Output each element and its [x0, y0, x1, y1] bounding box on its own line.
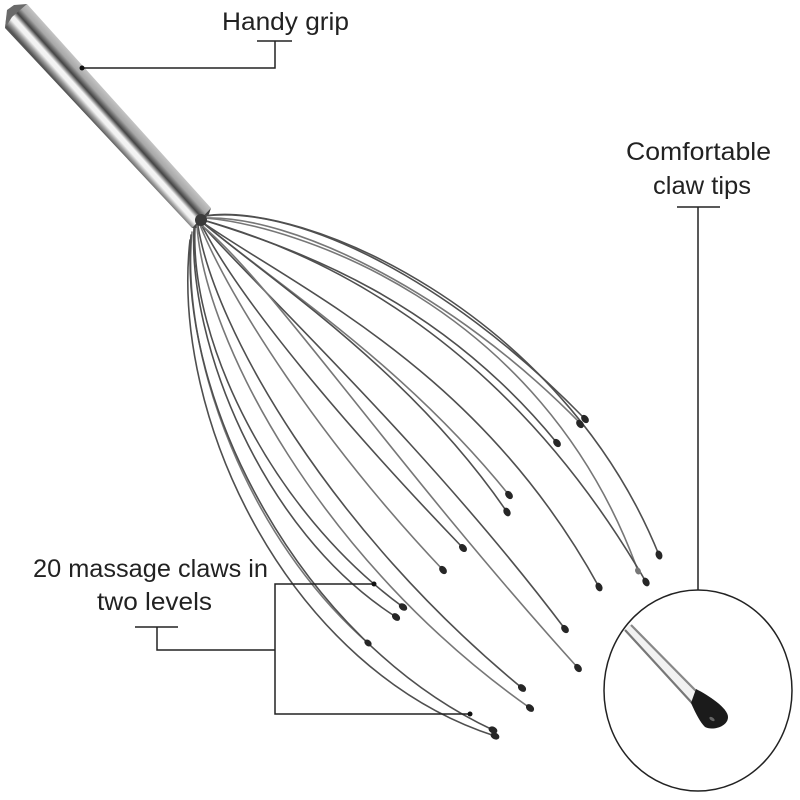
- callout: handy grip: Handy grip: [222, 8, 349, 36]
- handle: steel grip: [5, 4, 211, 228]
- callout: comfortable claw tips: claw tips: [653, 172, 751, 200]
- inset: magnified claw tip: [604, 590, 792, 791]
- callout: comfortable claw tips: [626, 138, 771, 590]
- callout: handy grip: [80, 8, 349, 70]
- callout: 20 massage claws in two levels: two levels: [97, 588, 212, 616]
- claw tips: black rubber beads: [363, 413, 664, 741]
- callout: 20 massage claws in two levels: [33, 555, 472, 716]
- hub: wire collar: [195, 214, 207, 226]
- callout: 20 massage claws in two levels: 20 massage claws in: [33, 555, 268, 583]
- callout: comfortable claw tips: Comfortable: [626, 138, 771, 166]
- wires: 20 massage claws: [188, 214, 659, 736]
